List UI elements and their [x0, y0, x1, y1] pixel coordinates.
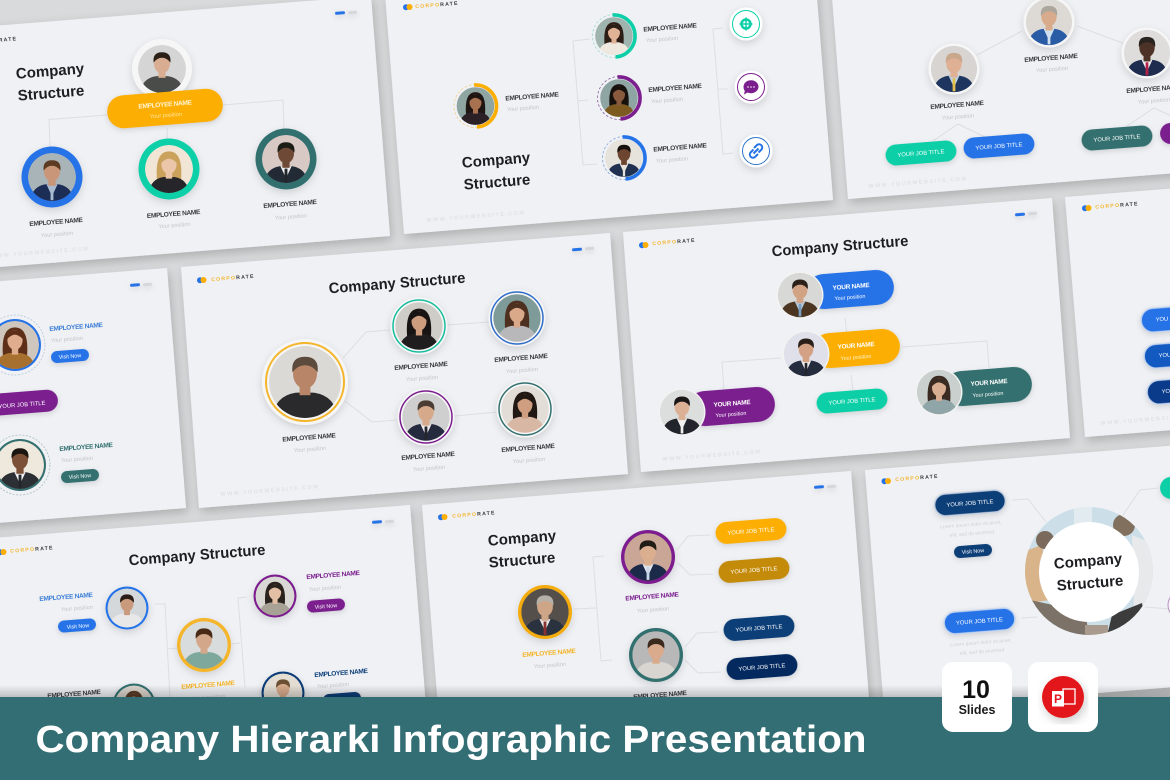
description text: elit, sed do eiusmod — [950, 529, 995, 539]
connectors — [722, 318, 989, 391]
label: EMPLOYEE NAME — [501, 443, 556, 454]
connectors — [574, 535, 721, 673]
description text — [940, 520, 1002, 539]
website: WWW.YOURWEBSITE.COM — [426, 210, 526, 224]
badge: 10 slides: 10 — [962, 676, 990, 704]
label: EMPLOYEE NAME — [401, 451, 456, 462]
visit button: Visit Now — [69, 473, 91, 481]
panel: slide 9 bottom middle — [422, 471, 870, 745]
logo: CORPORATE — [1095, 201, 1139, 211]
name card orange: YOUR NAME — [837, 341, 876, 351]
logo: CORPORATE — [10, 545, 54, 555]
outlined pill navy: YOUR JOB TITLE — [946, 499, 994, 509]
label: EMPLOYEE NAME — [648, 83, 703, 94]
label: Your position — [317, 682, 349, 690]
label — [653, 142, 708, 165]
job pill green: YOUR JOB TITLE — [828, 397, 876, 407]
job pill green — [816, 388, 888, 414]
label — [282, 432, 337, 454]
name card teal: Your position — [972, 391, 1004, 399]
label: Your position — [1138, 97, 1170, 106]
label: Your position — [51, 336, 83, 344]
label: Your position — [646, 36, 678, 44]
label — [401, 451, 456, 473]
panel: slide 4 middle left — [0, 268, 186, 542]
label — [394, 361, 449, 383]
panel: slide 6 center right — [623, 198, 1070, 472]
name card blue — [776, 269, 895, 318]
label: EMPLOYEE NAME — [29, 217, 84, 228]
label: Your position — [61, 605, 93, 613]
portrait: top employee — [132, 39, 192, 99]
name card teal — [916, 366, 1033, 416]
label: EMPLOYEE NAME — [625, 591, 680, 603]
label — [501, 443, 556, 465]
label — [29, 217, 84, 239]
orange name pill — [106, 88, 224, 129]
job pill purple — [1159, 118, 1170, 145]
portrait: teal ring — [112, 684, 156, 726]
portrait: orange ring — [177, 618, 231, 672]
logo: CORPORATE — [895, 474, 939, 483]
visit button — [61, 469, 99, 483]
pager — [335, 11, 357, 15]
job pill blue — [963, 133, 1035, 159]
portrait: navy ring — [262, 672, 304, 714]
icon: target — [730, 8, 762, 40]
visit button — [323, 692, 361, 706]
job pill blue: YOUR JOB TITLE — [975, 142, 1023, 152]
logo: CORPORATE — [415, 1, 459, 10]
panel: slide 10 bottom right — [865, 436, 1170, 710]
connectors — [343, 322, 497, 422]
label: Your position — [294, 446, 326, 454]
label — [1024, 53, 1079, 74]
label: Your position — [275, 213, 307, 222]
outlined pill navy — [934, 489, 1006, 517]
job pill teal — [1081, 125, 1153, 151]
description text: elit, sed do eiusmod — [960, 647, 1005, 657]
name card blue: YOUR NAME — [832, 282, 871, 292]
label: Your position — [41, 231, 73, 239]
connectors — [155, 597, 247, 697]
panel: slide 2 top middle — [385, 0, 833, 234]
name card blue: Your position — [834, 294, 866, 302]
orange name pill: Your position — [150, 112, 182, 120]
label: EMPLOYEE NAME — [59, 442, 114, 453]
label: Your position — [413, 465, 445, 473]
visit button: Visit Now — [315, 603, 337, 611]
logo — [639, 238, 696, 248]
heading: Structure — [17, 82, 85, 105]
heading — [461, 149, 531, 194]
label: Your position — [309, 585, 341, 593]
heading — [15, 60, 85, 105]
label: Your position — [534, 662, 566, 670]
pager — [130, 283, 152, 287]
label: EMPLOYEE NAME — [306, 570, 361, 581]
badge: PowerPoint icon: P — [1054, 692, 1062, 706]
visit button: Visit Now — [962, 548, 984, 556]
portrait: teal ring — [0, 435, 50, 495]
description text — [950, 638, 1012, 657]
portrait: blue ring — [22, 146, 82, 208]
label — [505, 91, 560, 113]
main title: Company Hierarki Infographic Presentation — [36, 719, 866, 761]
badge: 10 slides: Slides — [959, 703, 995, 717]
job pill gold: YOUR JOB TITLE — [730, 566, 778, 576]
portrait: main — [262, 339, 348, 425]
job pill teal: YOUR JOB TITLE — [1093, 134, 1141, 144]
portrait: blue ring — [0, 315, 45, 375]
label — [147, 209, 201, 230]
description text: Lorem ipsum dolor sit amet, — [950, 638, 1012, 648]
connectors — [1012, 488, 1170, 618]
photo circle with title — [1022, 505, 1156, 640]
label: Your position — [158, 222, 191, 230]
label: EMPLOYEE NAME — [633, 690, 688, 701]
label — [39, 592, 94, 613]
heading: Company — [461, 149, 531, 172]
logo: CORPORATE — [452, 510, 496, 520]
pager — [814, 485, 836, 489]
label: Your position — [193, 694, 225, 702]
label: EMPLOYEE NAME — [314, 668, 369, 679]
heading: Structure — [488, 549, 556, 572]
badge: 10 slides — [942, 662, 1012, 732]
shadow above band — [0, 685, 1170, 697]
label — [306, 570, 361, 593]
label — [263, 199, 318, 222]
label: EMPLOYEE NAME — [494, 353, 549, 364]
job pill navy — [723, 614, 795, 642]
icon: chat bubble — [734, 70, 768, 104]
portrait: right — [1122, 28, 1170, 78]
portrait: purple arc person — [598, 76, 640, 120]
job pill navy: YOUR JOB TITLE — [735, 624, 783, 634]
logo: CORPORATE — [211, 274, 255, 283]
job pill dark navy: YOUR JOB TITLE — [738, 663, 786, 673]
label: EMPLOYEE NAME — [282, 432, 337, 444]
portrait: main person — [454, 84, 497, 128]
label — [648, 83, 703, 105]
heading: Company — [487, 527, 557, 550]
label: Your position — [656, 156, 688, 165]
label: EMPLOYEE NAME — [653, 142, 708, 154]
heading: Company — [15, 60, 85, 83]
portrait: green ring — [138, 138, 200, 200]
label — [930, 100, 985, 122]
label: EMPLOYEE NAME — [39, 592, 94, 603]
connector lines — [49, 100, 284, 146]
heading — [487, 527, 557, 572]
label: Your position — [507, 105, 539, 113]
label — [49, 322, 104, 344]
visit button: Visit Now — [59, 353, 81, 361]
badge: PowerPoint icon — [1028, 662, 1098, 732]
label: EMPLOYEE NAME — [181, 680, 236, 691]
label: EMPLOYEE NAME — [522, 648, 577, 659]
portrait: blue ring — [106, 586, 148, 630]
pager — [1015, 212, 1037, 216]
portrait: teal ring — [256, 128, 316, 190]
label: Your position — [637, 606, 669, 615]
orange name pill: EMPLOYEE NAME — [138, 99, 193, 111]
website: WWW.YOURWEBSITE.COM — [868, 176, 968, 190]
portrait: teal ring — [629, 628, 683, 682]
visit button — [51, 349, 89, 363]
job pill orange — [715, 517, 787, 545]
job pill green: YOUR JOB TITLE — [897, 149, 945, 159]
logo: CORPORATE — [652, 238, 696, 247]
logo — [882, 474, 939, 484]
pager — [372, 520, 394, 524]
website: WWW.YOURWEBSITE.COM — [220, 484, 320, 498]
panel: slide 7 far right — [1065, 163, 1170, 437]
title: Company Structure — [771, 233, 909, 260]
label: EMPLOYEE NAME — [505, 91, 560, 103]
label: EMPLOYEE NAME — [1024, 53, 1079, 64]
label — [181, 680, 236, 702]
job pill dark navy — [726, 653, 798, 681]
name card purple: Your position — [715, 411, 747, 419]
photo circle with title: Structure — [1056, 572, 1124, 595]
label: Your position — [1036, 66, 1068, 74]
panel: slide 3 top right — [829, 0, 1170, 199]
label: EMPLOYEE NAME — [394, 361, 449, 372]
portrait: bottom middle — [398, 388, 454, 446]
panel: slide 1 top left — [0, 0, 390, 270]
outlined pill blue — [943, 607, 1016, 635]
label — [494, 353, 549, 375]
label: EMPLOYEE NAME — [49, 322, 104, 333]
name card purple: YOUR NAME — [713, 399, 752, 409]
outlined pill mid blue — [1143, 339, 1170, 369]
label: EMPLOYEE NAME — [263, 199, 318, 210]
title band — [0, 697, 1170, 780]
heading: Structure — [463, 171, 531, 194]
portrait: orange ring — [518, 585, 572, 639]
label: Your position — [651, 97, 683, 105]
label: EMPLOYEE NAME — [930, 100, 985, 111]
portrait: green arc person — [592, 14, 636, 58]
portrait: bottom right — [496, 380, 554, 438]
label: EMPLOYEE NAME — [47, 689, 102, 700]
tree connectors right — [713, 28, 733, 154]
job pill green — [885, 140, 957, 166]
label: EMPLOYEE NAME — [643, 22, 698, 34]
label: Your position — [513, 457, 545, 465]
label — [314, 668, 369, 690]
partial green pill — [1159, 472, 1170, 500]
label — [1126, 84, 1170, 106]
outlined pill blue — [1140, 303, 1170, 333]
title: Company Structure — [328, 270, 466, 297]
partial purple ring — [1168, 591, 1170, 619]
pager — [572, 247, 594, 251]
visit button: Visit Now — [67, 623, 89, 631]
name card teal: YOUR NAME — [970, 378, 1009, 388]
panel: slide 5 center hexagon layout — [181, 233, 628, 508]
purple job pill — [0, 389, 59, 417]
label: Your position — [942, 113, 974, 122]
label — [625, 591, 680, 615]
name card orange: Your position — [840, 354, 872, 362]
title: Company Structure — [128, 542, 266, 569]
portrait: top middle — [390, 298, 448, 354]
label: Your position — [406, 375, 438, 383]
outlined pill navy — [1146, 375, 1170, 405]
photo circle with title: Company — [1053, 550, 1123, 573]
name card purple — [658, 386, 776, 436]
portrait: blue arc person — [602, 136, 646, 180]
label — [59, 442, 114, 464]
visit button — [307, 598, 345, 613]
visit button — [954, 544, 992, 558]
job pill orange: YOUR JOB TITLE — [727, 527, 775, 537]
portrait: purple ring — [254, 574, 296, 618]
portrait: middle — [1024, 0, 1074, 48]
label — [522, 648, 577, 670]
label — [643, 22, 698, 44]
panel: slide 8 bottom left — [0, 505, 429, 779]
website: WWW.YOURWEBSITE.COM — [662, 449, 762, 463]
label: Your position — [61, 456, 93, 464]
visit button — [58, 618, 96, 633]
description text: Lorem ipsum dolor sit amet, — [940, 520, 1002, 530]
portrait: purple ring — [621, 530, 675, 584]
outlined pill blue: YOUR JOB TITLE — [956, 617, 1003, 627]
outlined pill blue: YOU — [1156, 317, 1168, 323]
tree connectors left — [573, 39, 597, 165]
connectors — [933, 26, 1170, 141]
label: Your position — [506, 367, 538, 375]
icon: link — [740, 134, 772, 168]
job pill gold — [718, 556, 790, 584]
name card orange — [782, 328, 901, 378]
portrait: left — [928, 44, 980, 94]
portrait: top right — [488, 290, 546, 346]
label: EMPLOYEE NAME — [147, 209, 201, 220]
